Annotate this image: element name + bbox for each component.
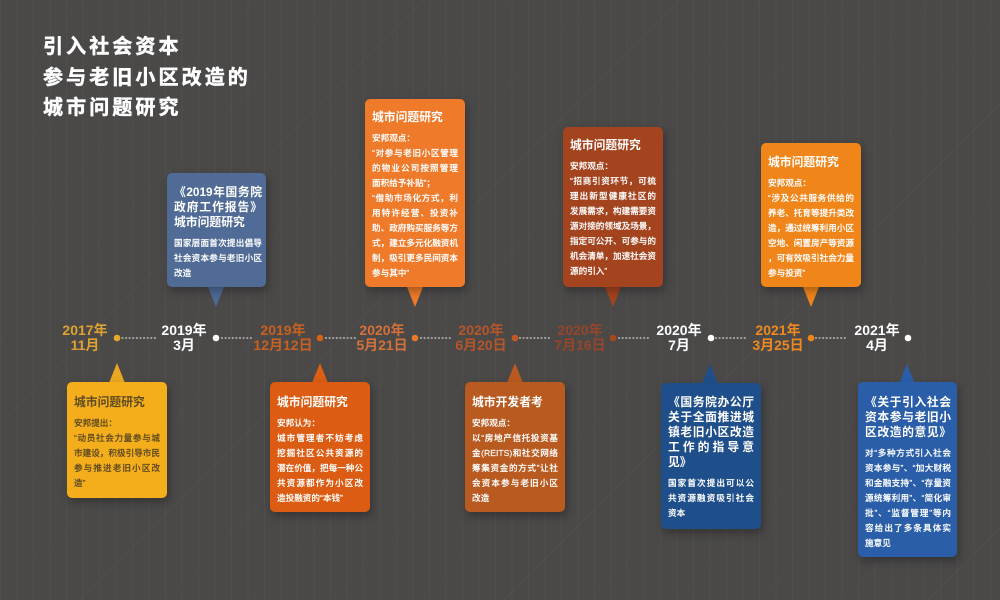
card text: 改造 <box>472 492 489 502</box>
card text: 指定可公开、可参与的 <box>570 236 656 246</box>
card body <box>858 382 957 557</box>
card text: 改造 <box>174 268 191 278</box>
card text: 挖掘社区公共资源的 <box>277 448 363 458</box>
date: 2017年11月: 11月 <box>71 337 99 353</box>
card text: 源统筹利用”、“简化审 <box>865 492 951 502</box>
card text: 参与投资” <box>768 268 805 278</box>
card heading <box>865 394 951 438</box>
card text: 会资本参与老旧小区 <box>472 478 558 488</box>
card text: 助、政府购买服务等方 <box>372 222 458 232</box>
card heading: 《国务院办公厅 <box>668 394 754 408</box>
card text: 空地、闲置房产等资源 <box>768 238 854 248</box>
card text: 源对接的领域及场景， <box>570 221 656 231</box>
card heading: 资本参与老旧小 <box>865 410 951 424</box>
card arrow <box>605 287 621 307</box>
panel: 2020-05-21 card <box>365 99 469 307</box>
card heading: 见》 <box>668 454 692 468</box>
card text: 市建设，积极引导市民 <box>74 448 160 458</box>
date: 2020年7月16日 <box>554 322 606 353</box>
card text: 安邦观点： <box>472 418 515 428</box>
card heading: 《2019年国务院 <box>174 184 262 198</box>
card text: 以“房地产信托投资基 <box>472 432 558 442</box>
panel: 2020-06-20 card <box>465 363 569 518</box>
date: 2020年7月: 2020年 <box>656 322 702 338</box>
date: 2019年3月: 3月 <box>173 337 195 353</box>
date: 2020年7月16日: 7月16日 <box>554 337 606 353</box>
card text: 安邦认为： <box>277 418 320 428</box>
card text: 用特许经营、投资补 <box>372 208 458 218</box>
date: 2020年5月21日: 2020年 <box>359 322 405 338</box>
card text: 安邦观点： <box>768 178 811 188</box>
card text: 潜在价值，把每一种公 <box>277 462 363 472</box>
date: 2021年3月25日: 3月25日 <box>752 337 804 353</box>
card text: 社会资本参与老旧小区 <box>174 252 262 262</box>
card heading: 城市开发者考 <box>472 394 543 408</box>
card body <box>661 383 761 529</box>
card text: 安邦提出： <box>74 418 117 428</box>
card arrow <box>312 363 328 382</box>
date: 2019年3月 <box>161 322 207 353</box>
card text: 面积给予补贴”； <box>372 178 435 188</box>
card text <box>570 161 656 276</box>
title: 参与老旧小区改造的 <box>43 66 251 88</box>
card text: 的物业公司按照管理 <box>372 162 458 172</box>
date: 2019年12月12日: 2019年 <box>260 322 306 338</box>
title: 引入社会资本 <box>43 36 182 58</box>
card text: 养老、托育等提升类改 <box>768 208 854 218</box>
card text: “借助市场化方式，利 <box>372 192 458 202</box>
card text: 发展需求，构建需要资 <box>570 206 656 216</box>
panel: 2019-12-12 card <box>270 363 374 518</box>
card text: 容给出了多条具体实 <box>865 522 951 532</box>
date: 2021年4月: 4月 <box>866 337 888 353</box>
title: 城市问题研究 <box>43 97 182 119</box>
card text: 安邦观点： <box>372 132 415 142</box>
card arrow <box>803 287 819 307</box>
card body <box>167 173 266 287</box>
card text: 参与推进老旧小区改 <box>74 462 160 472</box>
card text: 造，通过统筹利用小区 <box>768 222 854 232</box>
card text <box>174 238 262 278</box>
card arrow <box>407 287 423 307</box>
date: 2020年5月21日 <box>356 322 408 353</box>
card text: 机会清单，加速社会资 <box>570 251 656 261</box>
panel: 2021-03-25 card <box>761 143 865 307</box>
card heading: 城市问题研究 <box>277 394 348 408</box>
card arrow <box>900 364 914 382</box>
card text: 理出新型健康社区的 <box>570 191 656 201</box>
card text: 共资源融资吸引社会 <box>668 492 754 502</box>
card text: 资本 <box>668 508 685 518</box>
card text: 式，建立多元化融资机 <box>372 238 458 248</box>
title <box>43 36 251 119</box>
card heading: 城市问题研究 <box>74 394 145 408</box>
card text: 资本参与”、“加大财税 <box>865 462 951 472</box>
card heading: 城市问题研究 <box>174 214 245 228</box>
card text <box>372 132 458 278</box>
panel: 2021-04 card <box>858 364 961 563</box>
card body <box>465 382 565 512</box>
card heading: 城市问题研究 <box>570 138 641 152</box>
card text: “对参与老旧小区管理 <box>372 148 458 158</box>
card text: 城市管理者不妨考虑 <box>277 432 363 442</box>
card text: 制，吸引更多民间资本 <box>372 252 458 262</box>
date: 2021年4月 <box>854 322 900 353</box>
card arrow <box>110 363 124 382</box>
card heading: 关于全面推进城 <box>668 410 754 424</box>
panel: 2020-07 State Council card <box>661 364 765 535</box>
card text: 造投融资的“本钱” <box>277 492 343 502</box>
date: 2020年5月21日: 5月21日 <box>356 337 408 353</box>
card heading: 城市问题研究 <box>372 110 443 124</box>
date: 2017年11月 <box>62 322 108 353</box>
card body <box>761 143 861 287</box>
date: 2019年3月: 2019年 <box>161 322 207 338</box>
card text: “招商引资环节，可梳 <box>570 176 656 186</box>
card text: ，可有效吸引社会力量 <box>768 252 854 262</box>
card text: 对“多种方式引入社会 <box>865 448 951 458</box>
card text: 筹集资金的方式”让社 <box>472 462 558 472</box>
card arrow <box>702 364 718 383</box>
card arrow <box>208 287 224 307</box>
card text <box>865 446 951 550</box>
date: 2020年6月20日 <box>455 322 507 353</box>
date: 2020年7月 <box>656 322 702 353</box>
card text: 安邦观点： <box>570 161 613 171</box>
card text <box>74 418 160 488</box>
panel: 2017 card <box>67 363 171 504</box>
panel: 2019 government report card <box>167 173 270 307</box>
date: 2021年3月25日: 2021年 <box>755 322 801 338</box>
card heading <box>668 394 754 468</box>
card text: 造” <box>74 478 85 488</box>
card text: 参与其中” <box>372 268 409 278</box>
card text: 批”、“监督管理”等内 <box>865 508 951 518</box>
date: 2017年11月: 2017年 <box>62 322 108 338</box>
card heading: 城市问题研究 <box>768 154 839 168</box>
card body <box>270 382 370 512</box>
card text: 国家层面首次提出倡导 <box>174 238 262 248</box>
card heading: 政府工作报告》 <box>174 200 262 214</box>
date: 2021年3月25日 <box>752 322 804 353</box>
card text: 国家首次提出可以公 <box>668 478 754 488</box>
date: 2020年6月20日: 2020年 <box>458 322 504 338</box>
timeline axis with dots <box>114 334 912 342</box>
date: 2020年6月20日: 6月20日 <box>455 337 507 353</box>
card text <box>277 418 363 502</box>
card text: 和金融支持”、“存量资 <box>865 478 951 488</box>
card body <box>67 382 167 498</box>
card heading <box>174 184 262 228</box>
card heading: 工作的指导意 <box>668 440 754 454</box>
card text: “涉及公共服务供给的 <box>768 192 854 202</box>
card body <box>563 127 663 287</box>
date: 2020年7月: 7月 <box>668 337 690 353</box>
date: 2019年12月12日: 12月12日 <box>253 337 313 353</box>
card arrow <box>508 363 522 382</box>
panel: 2020-07-16 card <box>563 127 667 307</box>
card heading: 《关于引入社会 <box>865 394 951 408</box>
card text: “动员社会力量参与城 <box>74 432 160 442</box>
card body <box>365 99 465 287</box>
card text: 施意见 <box>865 538 891 548</box>
card heading: 区改造的意见》 <box>865 424 951 438</box>
card text <box>472 418 558 502</box>
card text <box>668 478 754 518</box>
card heading: 镇老旧小区改造 <box>668 424 754 438</box>
card text: 源的引入” <box>570 266 607 276</box>
card text: 共资源都作为小区改 <box>277 478 363 488</box>
card text <box>768 178 854 278</box>
card text: 金(REITS)和社交网络 <box>472 448 558 458</box>
date: 2020年7月16日: 2020年 <box>557 322 603 338</box>
date: 2021年4月: 2021年 <box>854 322 900 338</box>
date: 2019年12月12日 <box>253 322 313 353</box>
